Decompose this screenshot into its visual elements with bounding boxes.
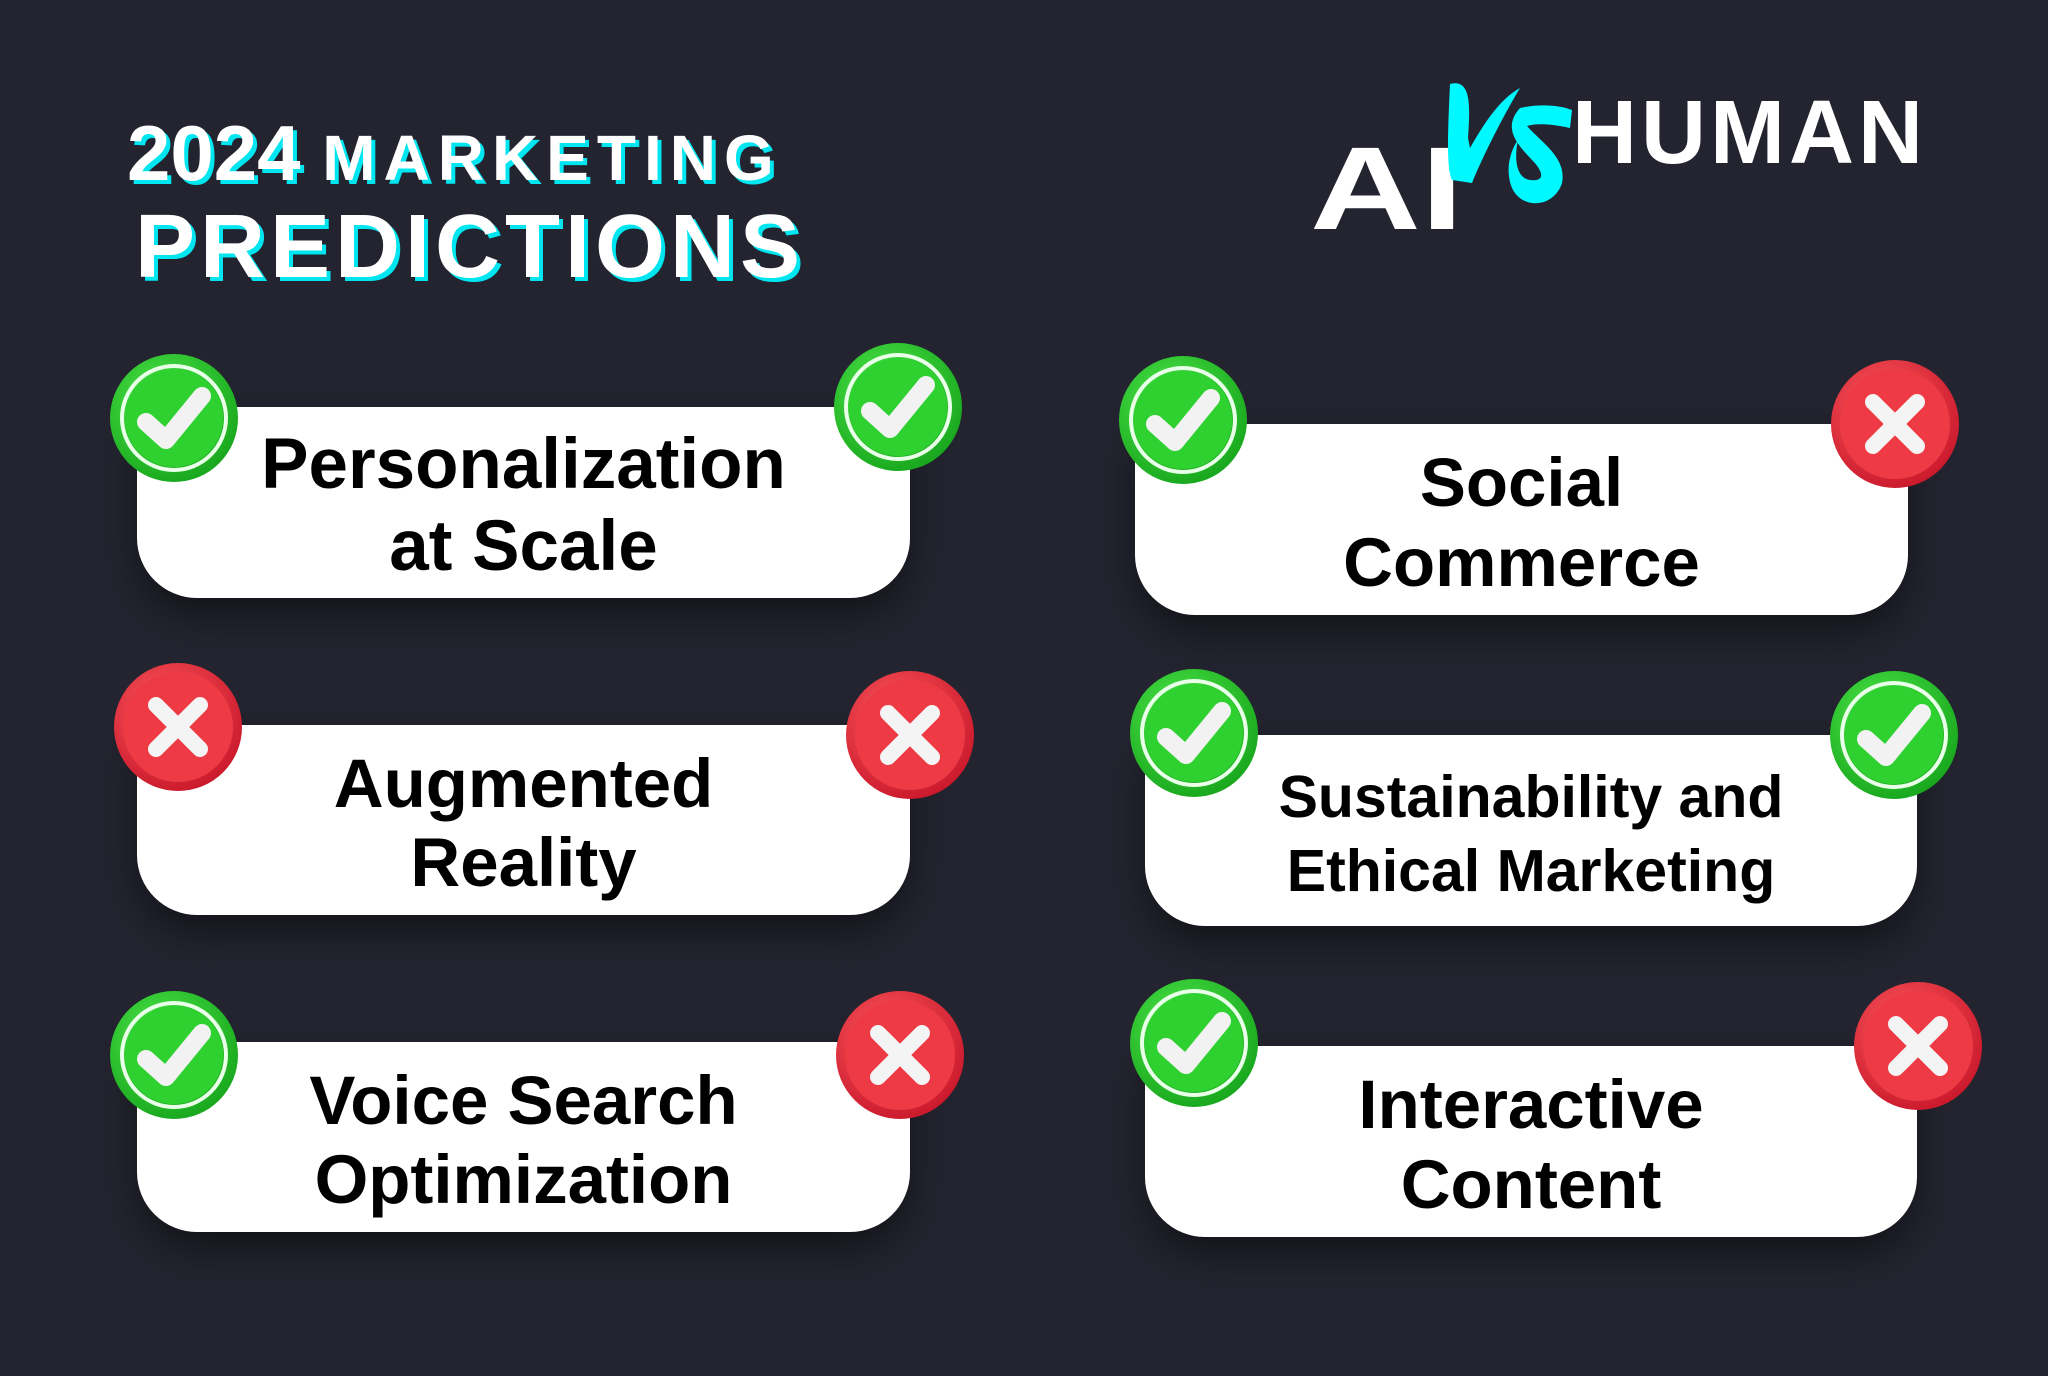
logo: AI vs HUMAN xyxy=(1310,83,1927,255)
card: Voice Search Optimization: Optimization xyxy=(315,1141,732,1218)
icon: check xyxy=(110,991,238,1119)
icon: check xyxy=(1130,979,1258,1107)
card: Personalization at Scale xyxy=(137,407,910,598)
card: Augmented Reality: Reality xyxy=(410,824,637,901)
icon: cross xyxy=(836,991,964,1119)
card: Personalization at Scale: at Scale xyxy=(389,506,658,586)
card: Augmented Reality xyxy=(137,725,910,915)
title: 2024 marketing predictions: PREDICTIONS xyxy=(135,197,805,297)
card: Interactive Content: Interactive xyxy=(1358,1066,1704,1143)
card: Sustainability and Ethical Marketing xyxy=(1145,735,1917,926)
card: Social Commerce: Social xyxy=(1420,444,1623,521)
card: Sustainability and Ethical Marketing: Ethical Marketing xyxy=(1287,838,1775,904)
card: Interactive Content xyxy=(1145,1046,1917,1237)
title: 2024 marketing predictions: 2024 MARKETING xyxy=(127,109,782,197)
card: Personalization at Scale: Personalization xyxy=(261,425,786,504)
card: Social Commerce: Commerce xyxy=(1343,524,1700,600)
title: 2024 marketing predictions xyxy=(127,109,805,297)
icon: cross xyxy=(846,671,974,799)
icon: cross xyxy=(1831,360,1959,488)
icon: cross xyxy=(114,663,242,791)
icon: check xyxy=(110,354,238,482)
card: Voice Search Optimization xyxy=(137,1042,910,1232)
card: Social Commerce xyxy=(1135,424,1908,615)
logo: AI vs HUMAN: HUMAN xyxy=(1572,83,1927,183)
card: Voice Search Optimization: Voice Search xyxy=(309,1062,738,1139)
card: Augmented Reality: Augmented xyxy=(334,745,713,822)
icon: check xyxy=(834,343,962,471)
icon: check xyxy=(1130,669,1258,797)
logo: AI vs HUMAN: AI xyxy=(1310,123,1463,255)
icon: check xyxy=(1830,671,1958,799)
card: Interactive Content: Content xyxy=(1401,1146,1661,1222)
icon: cross xyxy=(1854,982,1982,1110)
icon: check xyxy=(1119,356,1247,484)
card: Sustainability and Ethical Marketing: Sustainability and xyxy=(1279,764,1783,830)
